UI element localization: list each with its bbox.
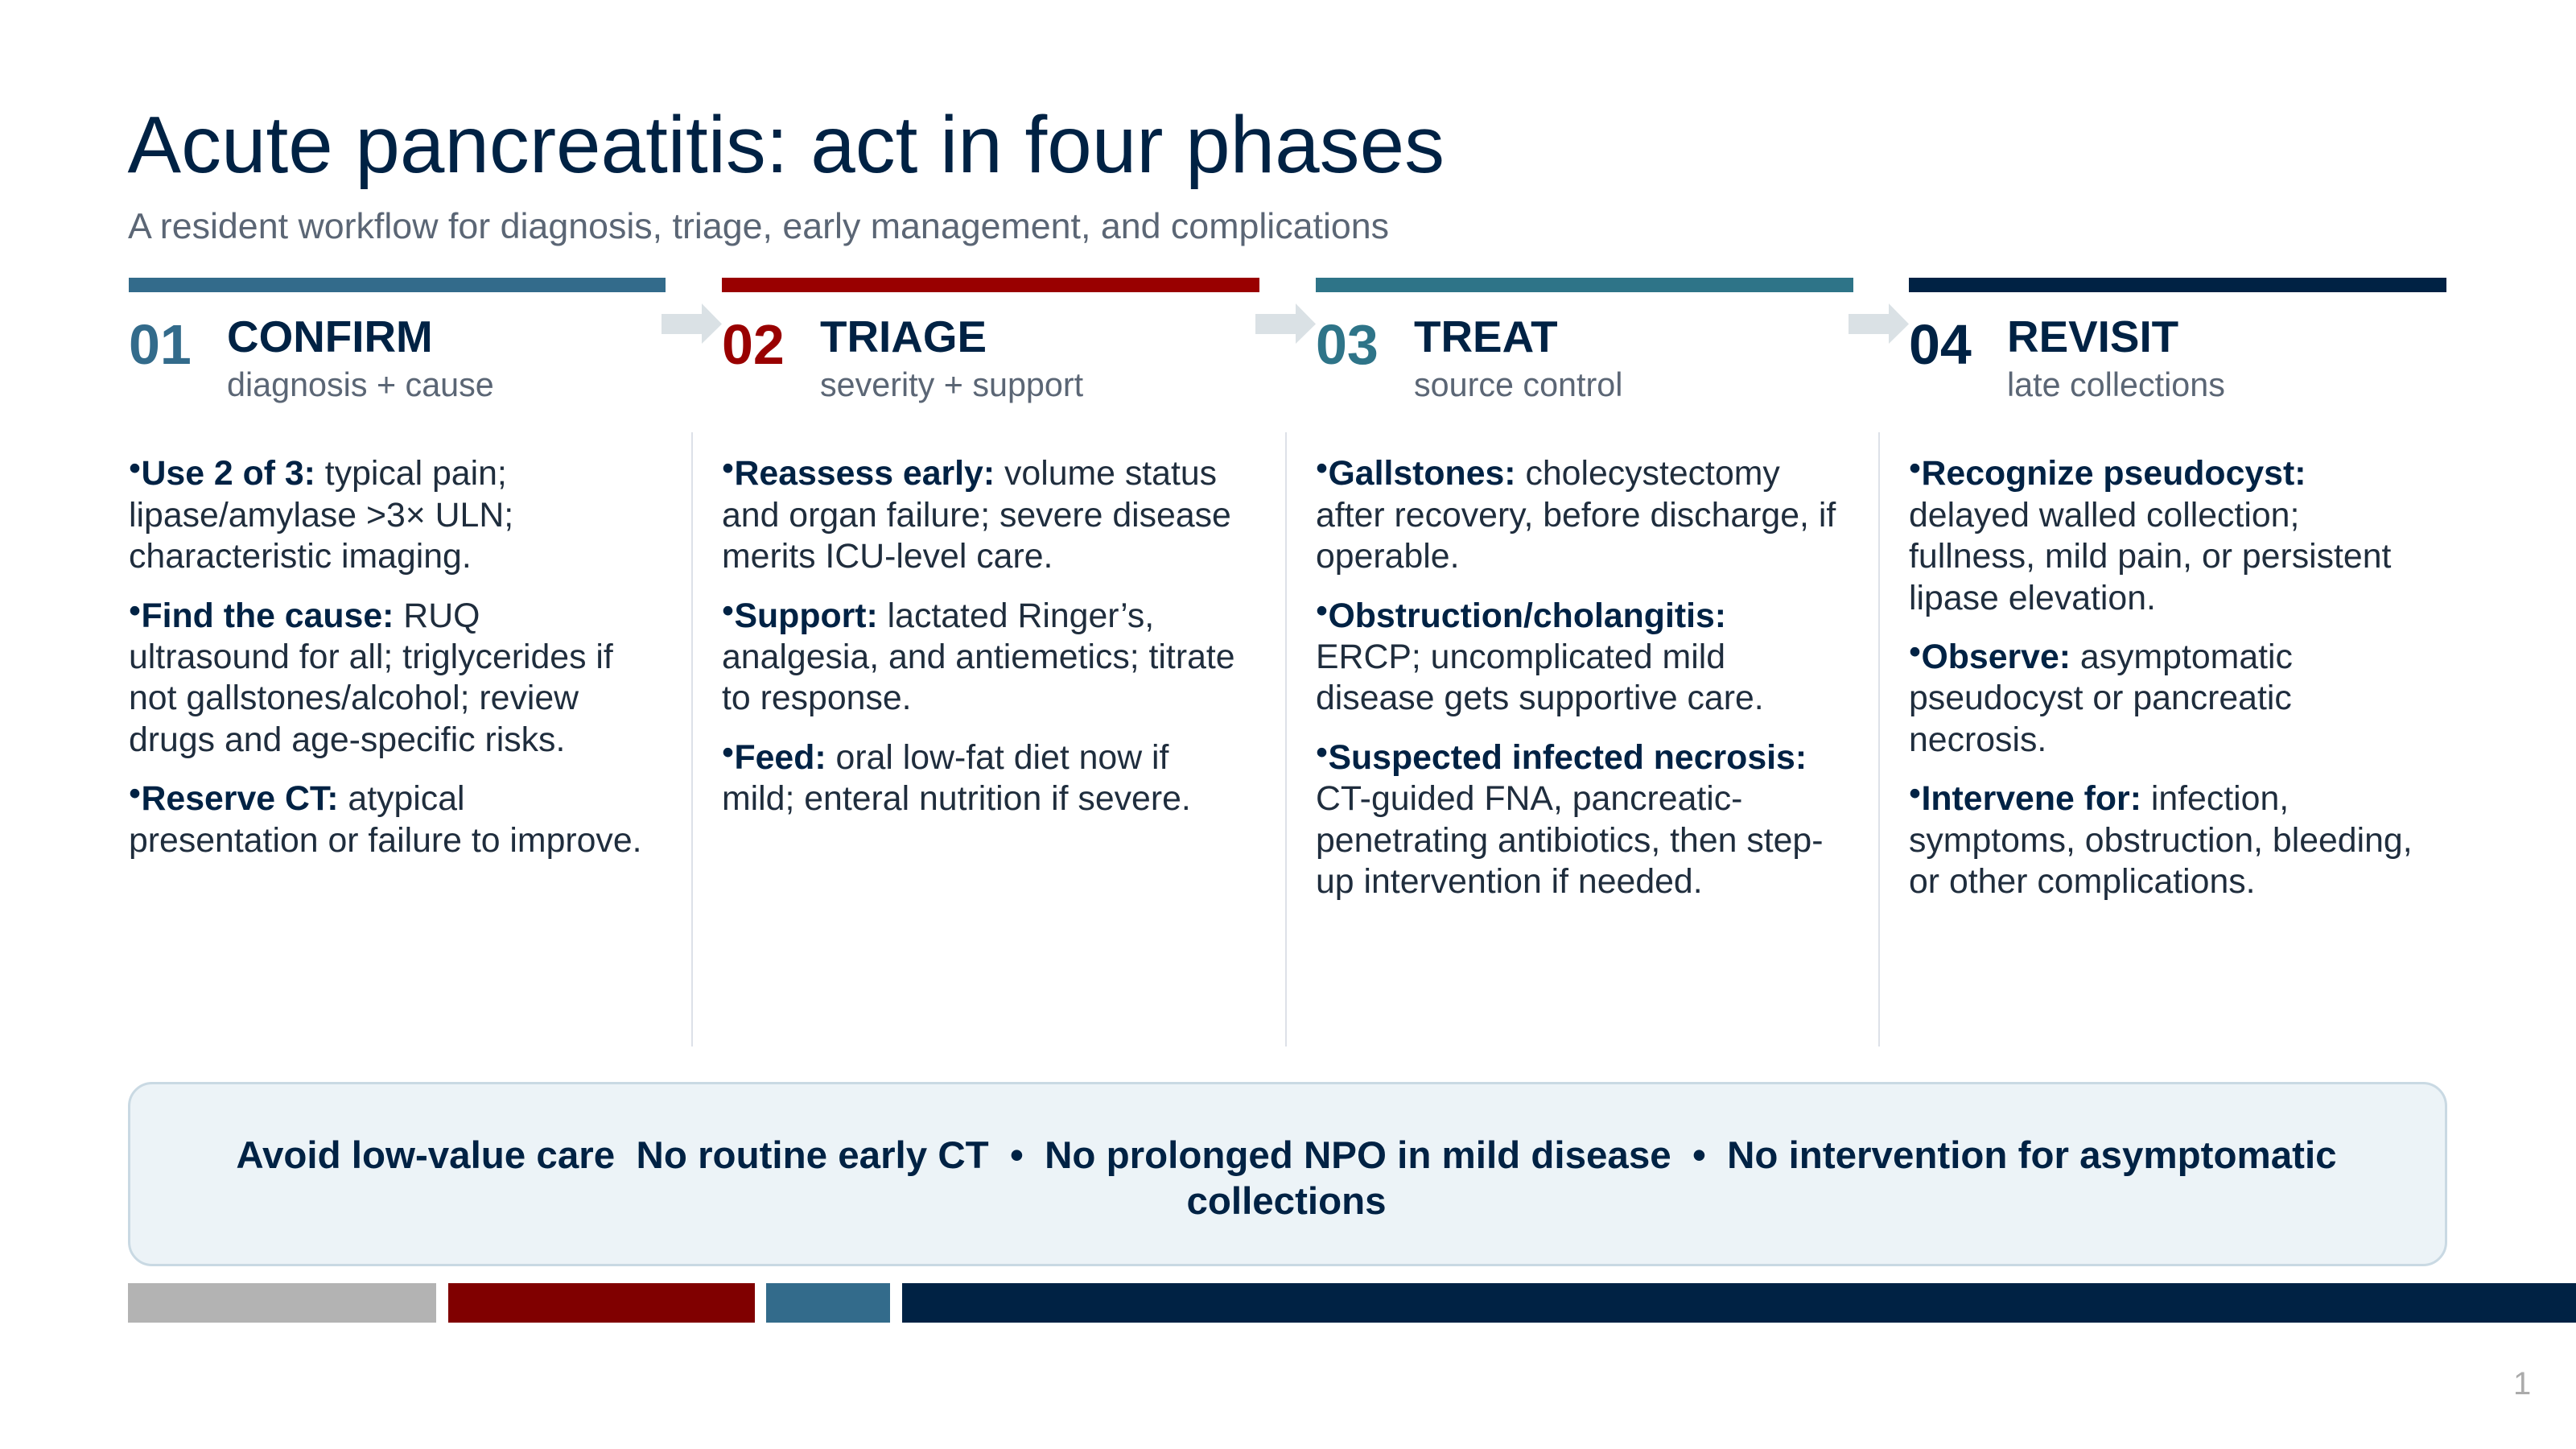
phase 2 bullet text: •Reassess early: volume status <box>722 449 1217 493</box>
phase 3 bullet text: after recovery, before discharge, if <box>1316 496 1836 535</box>
phase 2 bullet text: to response. <box>722 679 912 717</box>
phase 1 bullet text: presentation or failure to improve. <box>129 821 642 860</box>
column divider 3 <box>1878 432 1880 1046</box>
arrow: phase 3 to 4 <box>1849 303 1909 344</box>
footer bar: red <box>447 1283 755 1323</box>
phase 4 bullet text: necrosis. <box>1909 720 2046 759</box>
footer bar: blue <box>766 1283 890 1323</box>
phase 4 bullet text: symptoms, obstruction, bleeding, <box>1909 821 2413 860</box>
phase 3 bullet text: disease gets supportive care. <box>1316 679 1764 717</box>
phase 4 bullet text: or other complications. <box>1909 862 2256 901</box>
title: Acute pancreatitis: act in four phases <box>127 101 1445 190</box>
phase 3 bullet text: penetrating antibiotics, then step- <box>1316 821 1823 860</box>
phase 2 bullet text: mild; enteral nutrition if severe. <box>722 779 1191 818</box>
phase 4 bullet text: •Observe: asymptomatic <box>1909 633 2293 676</box>
phase 3 bullet text: ERCP; uncomplicated mild <box>1316 638 1725 676</box>
phase 1 bullet text: drugs and age-specific risks. <box>129 720 565 759</box>
phase 3 bullet text: CT-guided FNA, pancreatic- <box>1316 779 1742 818</box>
phase 4 heading: REVISIT <box>2007 312 2178 361</box>
phase 4 bullet text: •Recognize pseudocyst: <box>1909 449 2306 493</box>
phase 2 number: 02 <box>722 312 785 375</box>
phase 4 bullet text: lipase elevation. <box>1909 579 2156 617</box>
subtitle: A resident workflow for diagnosis, triage, early management, and complications <box>128 206 1389 246</box>
phase 2 subheading: severity + support <box>820 366 1083 403</box>
phase 1 heading: CONFIRM <box>227 312 433 361</box>
phase 3 subheading: source control <box>1414 366 1622 403</box>
column divider 1 <box>691 432 693 1046</box>
phase 4 bullet text: fullness, mild pain, or persistent <box>1909 537 2391 576</box>
phase 1 bullet text: characteristic imaging. <box>129 537 472 576</box>
phase 4 bullet text: pseudocyst or pancreatic <box>1909 679 2292 717</box>
phase 1 number: 01 <box>129 312 192 375</box>
phase 3 bullet text: •Obstruction/cholangitis: <box>1316 592 1726 635</box>
phase 2 top bar <box>722 278 1259 292</box>
phase 3 bullet text: up intervention if needed. <box>1316 862 1703 901</box>
phase 2 bullet text: merits ICU-level care. <box>722 537 1053 576</box>
column divider 2 <box>1285 432 1287 1046</box>
phase 1 bullet text: •Use 2 of 3: typical pain; <box>129 449 507 493</box>
phase 1 subheading: diagnosis + cause <box>227 366 494 403</box>
phase 2 bullet text: analgesia, and antiemetics; titrate <box>722 638 1235 676</box>
phase 4 bullet text <box>1909 449 2413 901</box>
phase 4 number: 04 <box>1909 312 1972 375</box>
phase 2 bullet text: •Feed: oral low-fat diet now if <box>722 733 1168 777</box>
callout text: Avoid low-value care No routine early CT • No prolonged NPO in mild disease • No intervention for asymptomatic collections <box>236 1133 2337 1222</box>
phase 3 number: 03 <box>1316 312 1379 375</box>
phase 3 bullet text: •Suspected infected necrosis: <box>1316 733 1807 777</box>
phase 4 top bar <box>1909 278 2446 292</box>
phase 3 bullet text: operable. <box>1316 537 1459 576</box>
footer bar: navy <box>902 1283 2576 1323</box>
phase 1 top bar <box>129 278 666 292</box>
phase 3 bullet text <box>1316 449 1836 901</box>
phase 3 top bar <box>1316 278 1853 292</box>
arrow: phase 1 to 2 <box>662 303 722 344</box>
phase 2 heading: TRIAGE <box>820 312 987 361</box>
footer bar: gray <box>128 1283 436 1323</box>
callout panel <box>128 1082 2447 1266</box>
phase 2 bullet text <box>722 449 1235 818</box>
phase 1 bullet text: not gallstones/alcohol; review <box>129 679 579 717</box>
phase 1 bullet text: •Find the cause: RUQ <box>129 592 480 635</box>
phase 3 heading: TREAT <box>1414 312 1558 361</box>
phase 2 bullet text: and organ failure; severe disease <box>722 496 1231 535</box>
phase 1 bullet text <box>129 449 642 860</box>
phase 1 bullet text: lipase/amylase >3× ULN; <box>129 496 513 535</box>
phase 2 bullet text: •Support: lactated Ringer’s, <box>722 592 1154 635</box>
phase 3 bullet text: •Gallstones: cholecystectomy <box>1316 449 1780 493</box>
phase 1 bullet text: ultrasound for all; triglycerides if <box>129 638 613 676</box>
phase 4 bullet text: delayed walled collection; <box>1909 496 2299 535</box>
phase 4 bullet text: •Intervene for: infection, <box>1909 774 2289 818</box>
phase 4 subheading: late collections <box>2007 366 2225 403</box>
arrow: phase 2 to 3 <box>1255 303 1316 344</box>
page number: 1 <box>2513 1366 2531 1402</box>
phase 1 bullet text: •Reserve CT: atypical <box>129 774 465 818</box>
